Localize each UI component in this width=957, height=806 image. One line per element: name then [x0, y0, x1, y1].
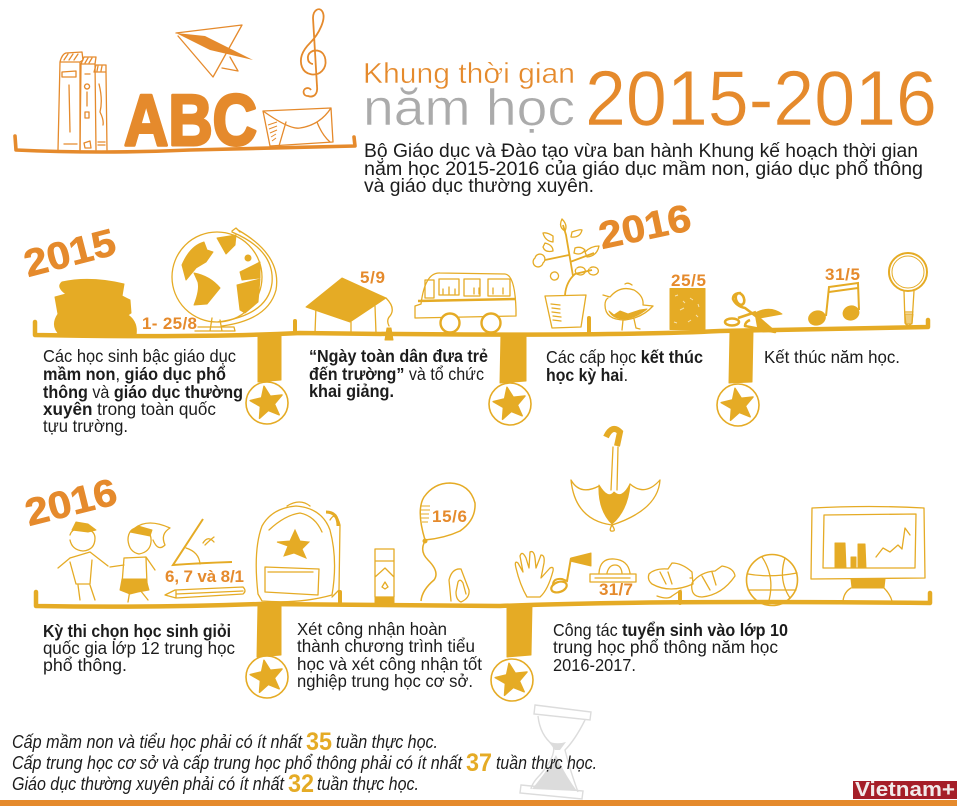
- icon: scissors: [725, 292, 782, 332]
- note line 2: [12, 749, 597, 777]
- icon: basketball: [746, 554, 798, 606]
- logo: Vietnam+: Vietnam+: [855, 779, 955, 801]
- icon: music note: [550, 553, 591, 594]
- text block: returning to school: [43, 346, 243, 436]
- date label 1-25/8: 1- 25/8: [142, 314, 197, 333]
- gold block with date: [670, 271, 706, 330]
- shelf ticks: [295, 318, 589, 333]
- year label 2016: 2016: [21, 471, 121, 535]
- title line: năm học: năm học: [363, 79, 575, 136]
- title line: Khung thời gian: Khung thời gian: [363, 58, 575, 90]
- text block: graduation recognition: học và xét công nhận tốt: [297, 654, 482, 674]
- text block: graduation recognition: [297, 619, 482, 691]
- icon: paper plane: [176, 25, 253, 77]
- intro text: [364, 141, 923, 197]
- intro text: và giáo dục thường xuyên.: [364, 176, 594, 197]
- stem with star 3: [717, 331, 759, 426]
- shelf: [15, 136, 355, 152]
- icon: sneakers: [648, 563, 735, 600]
- icon: envelope: [263, 108, 333, 146]
- text block: admission to grade 10: trung học phổ thông năm học: [553, 637, 778, 657]
- note line 1: [12, 728, 438, 756]
- icon: graduation cap: [306, 278, 393, 340]
- note line 1: Cấp mầm non và tiểu học phải có ít nhất: [12, 732, 303, 752]
- text block: returning to school: mầm non, giáo dục phổ: [43, 364, 226, 384]
- icon: potted plant: [533, 219, 599, 328]
- text block: school day: “Ngày toàn dân đưa trẻ: [309, 346, 488, 366]
- title years: 2015-2016: [585, 54, 937, 142]
- notes on required weeks: [12, 728, 597, 798]
- icon: school bus: [415, 273, 516, 332]
- text block: admission to grade 10: [553, 620, 788, 675]
- text block: excellent student exam: quốc gia lớp 12 trung học: [43, 638, 235, 658]
- year label 2016: 2016: [595, 197, 695, 258]
- text block: school day: [309, 346, 488, 401]
- text block: excellent student exam: [43, 621, 235, 675]
- note line 1: 35: [306, 728, 332, 756]
- icon: bird: [603, 283, 653, 330]
- icon: umbrella: [571, 429, 660, 531]
- shelf ticks: [340, 592, 680, 604]
- panel: timeline row one: [20, 197, 928, 436]
- shelf line: [35, 320, 928, 336]
- text block: returning to school: thông và giáo dục thường: [43, 382, 243, 402]
- text block: school day: khai giảng.: [309, 381, 394, 401]
- stem with star 1: [246, 335, 288, 424]
- text block: excellent student exam: Kỳ thi chọn học sinh giỏi: [43, 621, 231, 641]
- note line 2: 37: [466, 749, 492, 777]
- intro text: năm học 2015-2016 của giáo dục mầm non, giáo dục phổ thông: [364, 159, 923, 180]
- note line 2: Cấp trung học cơ sở và cấp trung học phổ thông phải có ít nhất: [12, 753, 463, 773]
- text block: excellent student exam: phổ thông.: [43, 655, 127, 675]
- text block: school day: đến trường” và tổ chức: [309, 364, 484, 384]
- icon: treble clef: [301, 9, 326, 97]
- note line 3: Giáo dục thường xuyên phải có ít nhất: [12, 774, 285, 794]
- intro text: Bộ Giáo dục và Đào tạo vừa ban hành Khung kế hoạch thời gian: [364, 141, 918, 162]
- icon: hand: [515, 552, 553, 597]
- shelf line: [36, 592, 930, 607]
- icon: hourglass: [520, 705, 591, 799]
- icon: children: [58, 522, 170, 602]
- panel: timeline row two: [21, 429, 930, 701]
- date label 15/6: 15/6: [432, 507, 467, 526]
- icon: protractor with date: [590, 559, 636, 599]
- note line 3: 32: [288, 770, 314, 798]
- icon: stack of blankets: [54, 279, 136, 335]
- note line 3: [12, 770, 419, 798]
- header illustration: bookshelf: [15, 9, 355, 161]
- note line 2: tuần thực học.: [496, 753, 597, 773]
- year label 2015: 2015: [20, 222, 120, 286]
- text block: admission to grade 10: 2016-2017.: [553, 655, 636, 675]
- icon: books: [58, 52, 107, 150]
- date label 25/5: 25/5: [671, 271, 706, 290]
- bottom bar: [0, 800, 957, 806]
- date label 6, 7 và 8/1: 6, 7 và 8/1: [165, 567, 244, 586]
- stem with star 4: [246, 604, 288, 698]
- text block: end of second semester: [546, 347, 703, 385]
- stem with star 2: [489, 333, 531, 425]
- stem with star 5: [491, 604, 533, 701]
- text block: graduation recognition: nghiệp trung học cơ sở.: [297, 671, 473, 691]
- icon: glue stick: [375, 549, 394, 605]
- icon: paper clip: [449, 569, 469, 602]
- text block: returning to school: tựu trường.: [43, 416, 128, 436]
- date label 5/9: 5/9: [360, 268, 385, 287]
- icon: angle and alpha: [173, 519, 232, 565]
- title: [363, 54, 937, 142]
- date label 31/7: 31/7: [599, 580, 633, 599]
- date label 31/5: 31/5: [825, 265, 860, 284]
- text block: admission to grade 10: Công tác tuyển sinh vào lớp 10: [553, 620, 788, 640]
- icon: globe: [172, 228, 277, 331]
- icon: backpack: [256, 502, 340, 602]
- text block: returning to school: Các học sinh bậc giáo dục: [43, 346, 236, 366]
- text block: graduation recognition: thành chương trình tiểu: [297, 636, 475, 656]
- icon: music notes: [807, 283, 861, 327]
- icon: computer monitor: [811, 506, 925, 601]
- note line 3: tuần thực học.: [317, 774, 419, 794]
- text block: returning to school: xuyên trong toàn quốc: [43, 399, 216, 419]
- text block: graduation recognition: Xét công nhận hoàn: [297, 619, 447, 639]
- text block: end of school year: Kết thúc năm học.: [764, 347, 900, 367]
- icon: pencil: [165, 587, 245, 598]
- text block: end of second semester: học kỳ hai.: [546, 365, 628, 385]
- text block: end of second semester: Các cấp học kết thúc: [546, 347, 703, 367]
- note line 1: tuần thực học.: [336, 732, 438, 752]
- icon: magnifier: [889, 253, 927, 326]
- letters ABC: ABC: [124, 81, 257, 161]
- icon: balloon with date: [420, 483, 475, 601]
